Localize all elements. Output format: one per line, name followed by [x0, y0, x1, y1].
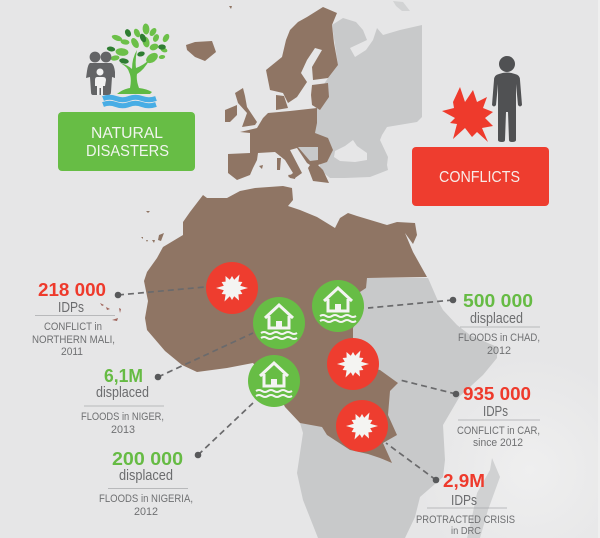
callout: 200 000 displaced: 2012 [134, 506, 158, 518]
map: gray Balkans [298, 147, 318, 161]
panel: conflicts [412, 147, 549, 206]
panel: natural disasters [58, 112, 195, 171]
callout: 218 000 IDPs: NORTHERN MALI, [32, 334, 115, 346]
right edge strip [598, 0, 600, 538]
marker: floods in Niger [253, 297, 305, 349]
map: continental Europe [228, 108, 333, 183]
lighter ocean glow [415, 355, 598, 538]
marker: conflict in CAR [327, 338, 379, 390]
icon: water waves [103, 97, 156, 106]
map: Madagascar [467, 458, 500, 538]
callout: 2,9M IDPs: 2,9M [443, 471, 485, 491]
map: gray Eastern Europe and Russia [310, 18, 422, 178]
callout: 935 000 IDPs: CONFLICT in CAR, [457, 425, 540, 437]
callout: 935 000 IDPs: since 2012 [473, 437, 523, 449]
icon: family and tree [86, 23, 171, 106]
heading: natural disasters: DISASTERS [86, 143, 169, 160]
callout: 218 000 IDPs [32, 280, 121, 358]
icon: explosion and person [442, 56, 522, 142]
callout: 200 000 displaced: displaced [119, 467, 173, 484]
callout: 500 000 displaced: 2012 [487, 345, 511, 357]
icon: explosion [442, 87, 493, 142]
leader lines [118, 287, 456, 480]
map: Iceland [186, 41, 216, 61]
callout: 200 000 displaced [99, 449, 201, 518]
callout: 6,1M displaced [81, 366, 164, 436]
marker: floods in Nigeria [248, 355, 300, 407]
map of Europe and Africa [100, 1, 500, 538]
callout: 2,9M IDPs: in DRC [451, 526, 481, 537]
callout: 935 000 IDPs [453, 384, 540, 449]
callout: 500 000 displaced: 500 000 [463, 291, 533, 311]
map: Novaya Zemlya [393, 1, 410, 11]
heading: natural disasters: NATURAL [91, 125, 163, 142]
map: Africa brown area [144, 186, 427, 463]
map: Cape Verde islands [100, 303, 121, 321]
map: Ireland [225, 105, 237, 122]
map: Great Britain [235, 88, 257, 127]
callout: 2,9M IDPs: IDPs [451, 492, 477, 509]
map: Black Sea [334, 140, 367, 162]
callout: 500 000 displaced: FLOODS in CHAD, [458, 332, 540, 344]
map: Scandinavia [266, 7, 338, 103]
callout: 218 000 IDPs: CONFLICT in [44, 321, 102, 333]
callout: 6,1M displaced: 2013 [111, 424, 135, 436]
map: Denmark [276, 95, 288, 110]
callout: 935 000 IDPs: 935 000 [463, 384, 531, 404]
callout: 218 000 IDPs: 218 000 [38, 280, 106, 300]
callout: 6,1M displaced: displaced [96, 384, 149, 401]
callout: 500 000 displaced [450, 291, 540, 357]
callout: 6,1M displaced: 6,1M [104, 366, 143, 386]
icon: tree [106, 23, 171, 94]
callout: 218 000 IDPs: IDPs [58, 299, 84, 316]
icon: person [492, 56, 522, 142]
marker: conflict in northern Mali [206, 262, 258, 314]
map: Mediterranean islands [259, 158, 296, 179]
marker: crisis in DRC [336, 400, 388, 452]
heading: conflicts: CONFLICTS [439, 169, 520, 186]
callout: 6,1M displaced: FLOODS in NIGER, [81, 411, 164, 423]
callout: 218 000 IDPs: 2011 [61, 346, 83, 358]
map: Baltic states [311, 83, 329, 110]
callout: 500 000 displaced: displaced [470, 310, 523, 327]
callout: 935 000 IDPs: IDPs [483, 403, 508, 420]
map: Southern Africa [297, 278, 497, 538]
icon: family [86, 52, 115, 95]
callout: 2,9M IDPs [416, 471, 515, 537]
callout: 200 000 displaced: FLOODS in NIGERIA, [99, 493, 193, 505]
callout: 200 000 displaced: 200 000 [112, 449, 183, 469]
marker: floods in Chad [312, 280, 364, 332]
map: small islands [141, 6, 232, 243]
callout: 2,9M IDPs: PROTRACTED CRISIS [416, 514, 515, 526]
